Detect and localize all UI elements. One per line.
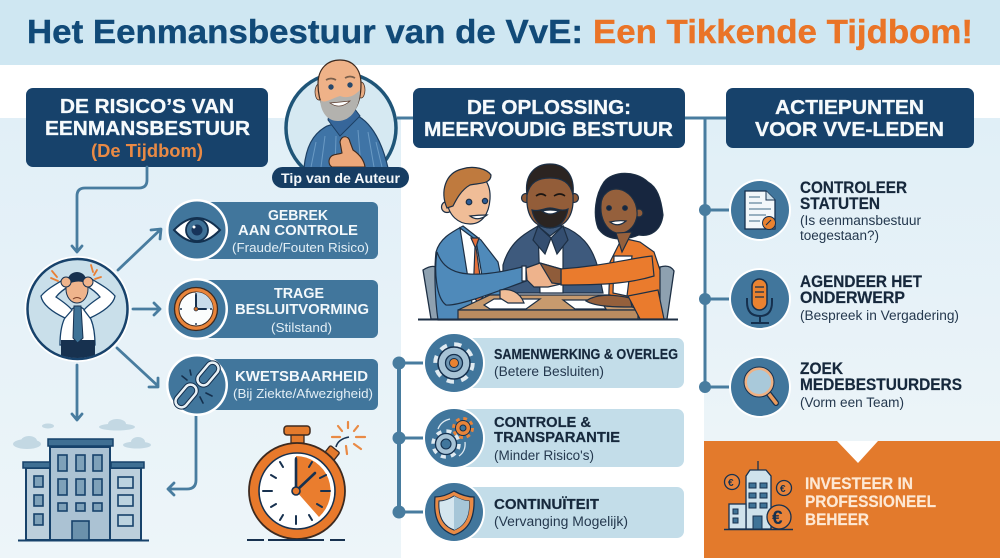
action: check statutes: (Is eenmansbestuur: [800, 213, 922, 228]
title: Het Eenmansbestuur van de VvE:: [27, 13, 583, 50]
icon: author portrait: [304, 60, 388, 168]
title: [27, 13, 973, 50]
panel: lack of control: (Fraude/Fouten Risico): [232, 240, 369, 255]
panel: left background: [0, 118, 401, 558]
panel: slow decisions: [166, 278, 378, 340]
action: check statutes: CONTROLEER: [800, 179, 907, 197]
action: check statutes: toegestaan?): [800, 228, 879, 243]
action: find co-board members: ZOEK: [800, 360, 843, 378]
panel: slow decisions: TRAGE: [274, 286, 324, 302]
arrow: to building: [72, 365, 82, 420]
icon: gear: [436, 344, 472, 382]
panel: vulnerability: [166, 354, 378, 416]
arrow: header to stressed man: [72, 167, 147, 252]
action: check statutes: [729, 179, 922, 243]
author badge: Tip van de Auteur: [281, 170, 401, 186]
icon: stopwatch bomb: [247, 422, 365, 540]
icon: magnifying glass: [744, 367, 776, 403]
action: put on agenda: [729, 268, 959, 330]
arrow: to lack of control: [118, 229, 161, 270]
panel: vulnerability: KWETSBAARHEID: [235, 369, 368, 385]
action: put on agenda: ONDERWERP: [800, 289, 905, 307]
heading: solution: DE OPLOSSING:: [467, 97, 631, 119]
icon: document: [745, 191, 776, 230]
icon: building with euro coins: [724, 461, 793, 530]
action: find co-board members: MEDEBESTUURDERS: [800, 376, 962, 394]
panel: slow decisions: BESLUITVORMING: [235, 302, 369, 318]
icon: broken chain: [173, 360, 221, 410]
panel: control and transparency: CONTROLE &: [494, 415, 592, 431]
panel: slow decisions: (Stilstand): [271, 320, 332, 335]
panel: invest callout: €: [780, 484, 786, 495]
panel: author tip: [272, 60, 409, 188]
icon: microphone: [747, 279, 772, 323]
action: put on agenda: AGENDEER HET: [800, 273, 922, 291]
panel: continuity: (Vervanging Mogelijk): [494, 514, 628, 529]
panel: invest callout: PROFESSIONEEL: [805, 493, 936, 511]
heading: solution: MEERVOUDIG BESTUUR: [424, 119, 674, 141]
panel: control and transparency: (Minder Risico's): [494, 448, 594, 463]
panel: control and transparency: TRANSPARANTIE: [494, 430, 620, 446]
connector: solution list: [392, 356, 425, 518]
connector lines between headers: [397, 116, 726, 120]
icon: eye: [174, 218, 220, 242]
connector: action list: [699, 118, 731, 393]
title band: [0, 0, 1000, 65]
heading: solution: [413, 88, 685, 148]
title: Een Tikkende Tijdbom!: [593, 13, 973, 50]
heading: risks: [26, 88, 268, 167]
panel: lack of control: GEBREK: [268, 208, 329, 224]
icon: two gears: [433, 418, 472, 457]
arrow: to slow decisions: [133, 303, 160, 315]
panel: invest callout: INVESTEER IN: [805, 475, 913, 493]
arrow: to vulnerability: [117, 348, 158, 387]
panel: right background: [704, 118, 1000, 441]
icon: apartment building: [13, 419, 151, 540]
arrow: vulnerability to building: [168, 416, 196, 495]
panel: cooperation: SAMENWERKING & OVERLEG: [494, 347, 678, 363]
action: check statutes: STATUTEN: [800, 195, 880, 213]
heading: action points: VOOR VVE-LEDEN: [755, 119, 944, 141]
heading: action points: [726, 88, 974, 148]
panel: cooperation: (Betere Besluiten): [494, 364, 604, 379]
person: left man: [435, 167, 526, 320]
panel: invest callout: BEHEER: [805, 511, 869, 529]
icon: clock: [174, 288, 218, 330]
chairs: [423, 266, 674, 319]
table: [458, 290, 664, 319]
panel: invest callout: [704, 441, 1000, 558]
person: woman: [560, 173, 663, 319]
panel: invest callout: €: [728, 478, 734, 489]
icon: shield: [435, 491, 474, 535]
panel: cooperation: [423, 332, 684, 394]
action: find co-board members: [729, 356, 962, 418]
heading: action points: ACTIEPUNTEN: [775, 97, 924, 119]
panel: continuity: [423, 481, 684, 543]
panel: lack of control: AAN CONTROLE: [238, 223, 358, 239]
panel: invest callout: €: [772, 508, 783, 529]
illustration: three people shaking hands: [418, 164, 678, 320]
panel: lack of control: [166, 199, 378, 261]
person: middle man: [503, 164, 603, 293]
action: find co-board members: (Vorm een Team): [800, 395, 904, 410]
action: put on agenda: (Bespreek in Vergadering): [800, 308, 959, 323]
panel: control and transparency: [423, 407, 684, 469]
heading: risks: (De Tijdbom): [91, 141, 203, 161]
panel: continuity: CONTINUÏTEIT: [494, 496, 599, 513]
handshake: [526, 263, 561, 287]
heading: risks: DE RISICO’S VAN: [60, 96, 234, 118]
heading: risks: EENMANSBESTUUR: [45, 118, 251, 140]
icon: stressed man: [24, 256, 130, 362]
panel: vulnerability: (Bij Ziekte/Afwezigheid): [233, 386, 373, 401]
